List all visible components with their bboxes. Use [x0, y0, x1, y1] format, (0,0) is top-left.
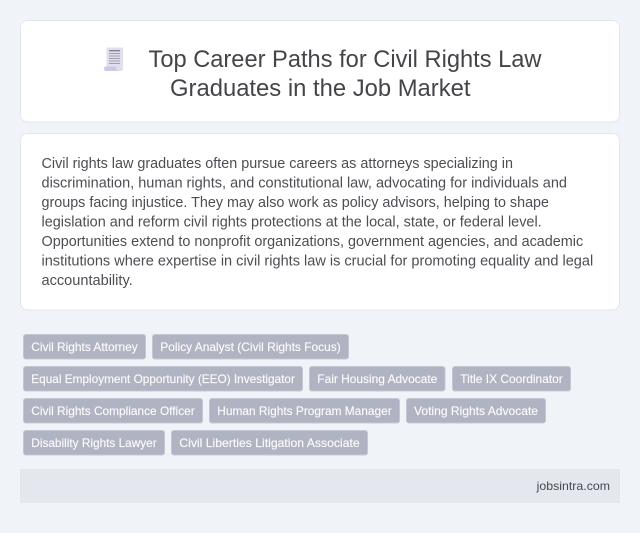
tag: Disability Rights Lawyer: Disability Rights Lawyer — [31, 436, 157, 450]
tag: Title IX Coordinator: Title IX Coordinator — [460, 372, 563, 386]
tag: Civil Rights Compliance Officer — [24, 398, 202, 423]
description text: institutions where expertise in civil rights law is crucial for promoting equality and legal — [42, 254, 593, 270]
tag: Voting Rights Advocate — [406, 398, 546, 423]
title — [148, 46, 542, 102]
description text: groups facing injustice. They may also work as policy advisors, helping to shape — [42, 195, 549, 211]
tag: Fair Housing Advocate — [310, 366, 445, 391]
tag: Title IX Coordinator — [452, 366, 570, 391]
title: Top Career Paths for Civil Rights Law — [148, 46, 542, 73]
footer bar — [20, 469, 620, 503]
tag: Fair Housing Advocate: Fair Housing Advocate — [317, 372, 438, 386]
description text: Opportunities extend to nonprofit organizations, government agencies, and academic — [42, 234, 583, 250]
icon: document scroll — [104, 48, 123, 71]
tag: Human Rights Program Manager: Human Rights Program Manager — [217, 404, 392, 418]
panel: header — [20, 20, 620, 122]
description text: accountability. — [42, 273, 133, 289]
tag: Human Rights Program Manager — [210, 398, 400, 423]
tag: EEO Investigator: Equal Employment Opportunity (EEO) Investigator — [31, 372, 295, 386]
title: Graduates in the Job Market — [170, 75, 471, 102]
tag: Policy Analyst — [152, 334, 348, 359]
tag: Civil Rights Compliance Officer: Civil Rights Compliance Officer — [31, 404, 195, 418]
description text: discrimination, human rights, and constitutional law, advocating for individuals and — [42, 176, 567, 192]
tag: Policy Analyst: Policy Analyst (Civil Rights Focus) — [160, 340, 341, 354]
tag: Civil Rights Attorney — [24, 334, 146, 359]
footer source text: jobsintra.com — [536, 479, 610, 493]
tag: Civil Liberties Litigation Associate: Civil Liberties Litigation Associate — [179, 436, 360, 450]
description text — [42, 156, 593, 289]
description text: Civil rights law graduates often pursue careers as attorneys specializing in — [42, 156, 513, 172]
panel: description — [20, 134, 620, 310]
tag: Civil Rights Attorney: Civil Rights Attorney — [31, 340, 138, 354]
description text: legislation and reform civil rights protections at the local, state, or federal level. — [42, 214, 542, 230]
career path tags — [24, 334, 570, 455]
tag: Disability Rights Lawyer — [24, 430, 164, 455]
tag: Voting Rights Advocate: Voting Rights Advocate — [414, 404, 538, 418]
tag: Civil Liberties Litigation Associate — [172, 430, 368, 455]
tag: EEO Investigator — [24, 366, 302, 391]
